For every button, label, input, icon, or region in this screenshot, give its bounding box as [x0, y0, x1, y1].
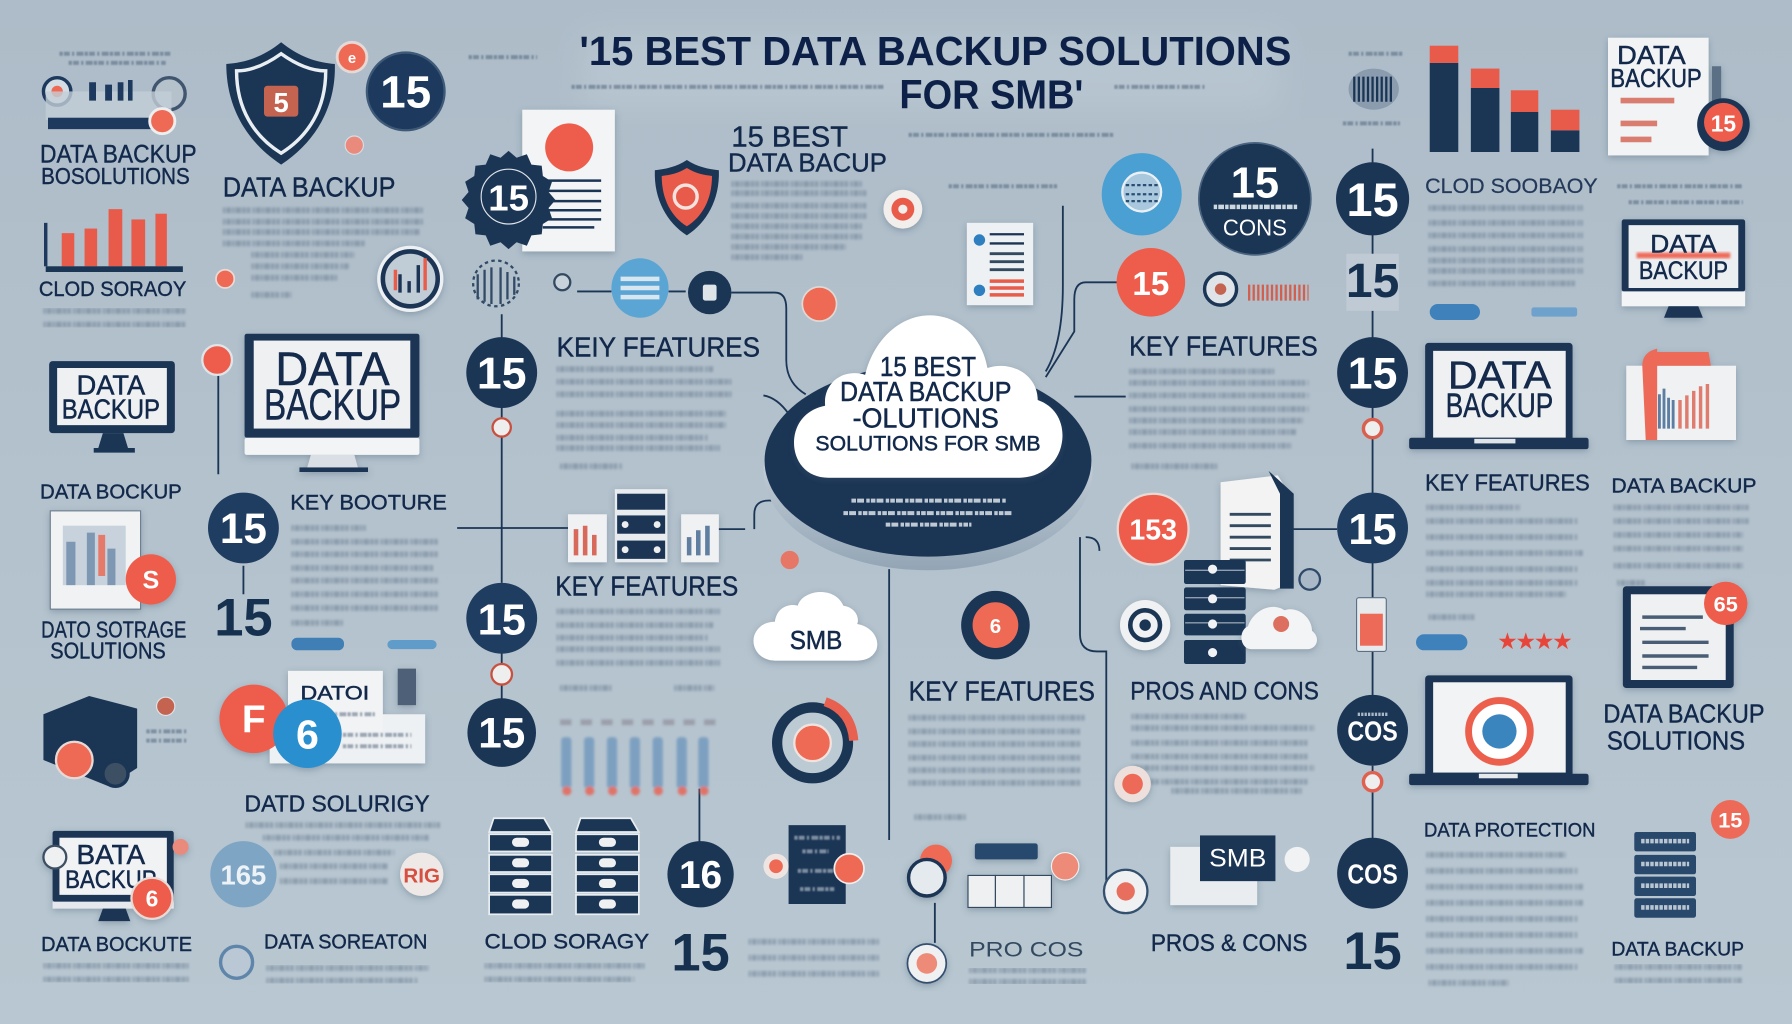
badge: red 15: 15: [1132, 266, 1169, 303]
icon: blue globe circle: [1102, 153, 1182, 235]
heading: 15 best data backup: 15 BEST: [731, 121, 848, 153]
panel: tablet document: 65: [1714, 591, 1738, 616]
panel: small cards and cluster: [909, 843, 1079, 907]
heading: key features: KEY FEATURES: [1129, 330, 1318, 361]
badge: cos: COS: [1347, 716, 1398, 747]
icon: small ring: [221, 946, 253, 978]
panel: server list: [1634, 832, 1696, 918]
badge: red 15: [1117, 248, 1185, 317]
red label: [1642, 782, 1703, 791]
title: '15 BEST DATA BACKUP SOLUTIONS: [579, 28, 1291, 74]
badge: 15: [466, 337, 537, 408]
heading: data backup: DATA BACKUP: [1611, 475, 1757, 498]
badge: 16: [667, 841, 734, 907]
icon: red badge 15: [1711, 800, 1750, 839]
panel: report document: S: [142, 567, 159, 595]
text block: [246, 825, 440, 881]
heading: key features: KEY FEATURES: [555, 570, 738, 601]
text block: [1131, 717, 1314, 791]
rating stars: ★★★★: [1497, 628, 1573, 654]
panel: document with F and 6 badges: 6: [296, 712, 319, 758]
icon: ring chart: [377, 246, 443, 312]
text block: [1611, 764, 1691, 767]
icon: small red mark: [345, 136, 363, 154]
heading: data storage solutions: SOLUTIONS: [50, 637, 166, 663]
badge: 15 cons: [1199, 143, 1311, 255]
panel: central cloud: -OLUTIONS: [853, 402, 999, 433]
chart: stacked bars: [1430, 46, 1579, 152]
heading: pro cons: PRO COS: [969, 937, 1083, 962]
number 15: 15: [1346, 255, 1399, 308]
badge: red ring: [400, 853, 443, 896]
heading: 15 best data backup: DATA BACUP: [728, 147, 887, 177]
panel: document with red badge: 15: [1711, 110, 1736, 136]
badge: 165: 165: [221, 860, 266, 891]
heading: data backup solutions: [40, 140, 197, 189]
badge: 15: [467, 698, 536, 767]
panel: small document: [967, 223, 1033, 305]
panel: laptop with ring: [1409, 675, 1589, 785]
heading: cloud storage: CLOD SOOBAOY: [1425, 173, 1598, 198]
badge: 16: 16: [679, 854, 722, 897]
number 15: 15: [671, 923, 730, 982]
text block: [1426, 855, 1583, 983]
heading: data protection: DATA PROTECTION: [1424, 820, 1595, 842]
bar chart: red bars: [46, 209, 183, 272]
icon: striped globe: [1343, 54, 1403, 123]
panel: folder chart: [1626, 349, 1736, 440]
panel: large monitor: BACKUP: [264, 381, 401, 429]
badge: 15: 15: [220, 505, 267, 552]
heading: data backup solutions: DATA BACKUP: [1603, 698, 1765, 728]
icon: red ring badge: [961, 591, 1030, 659]
icon: red badge: e: [348, 51, 356, 67]
panel: navy card with badges: [763, 825, 864, 904]
badge: 15: 15: [477, 350, 527, 399]
panel: small monitor: BACKUP: [62, 393, 160, 424]
panel: central cloud: [763, 315, 1093, 570]
panel: tablet document: [1623, 582, 1747, 688]
panel: document with red badge: DATA: [1617, 40, 1686, 70]
icon: target circle: [883, 190, 922, 229]
text block: [909, 718, 1086, 817]
text block: [1617, 186, 1743, 202]
badge: 15: [1337, 493, 1408, 563]
heading: key features: KEIY FEATURES: [557, 332, 760, 363]
heading: key feature: KEY BOOTURE: [290, 490, 447, 515]
heading: 15 best data backup: [728, 121, 887, 177]
node marker: [1363, 773, 1382, 791]
text block: [557, 369, 731, 466]
panel: laptop data backup: DATA: [1448, 355, 1551, 398]
badge: 15: [466, 583, 537, 654]
badge: 15 cons: CONS: [1223, 214, 1287, 240]
heading: pros and cons: PROS AND CONS: [1130, 677, 1319, 705]
panel: report document: [50, 511, 176, 609]
heading: cloud storage: CLOD SORAGY: [485, 929, 649, 954]
badge: cos: [1337, 838, 1408, 909]
text block: [1426, 507, 1583, 617]
panel: document and servers: 153: [1129, 514, 1177, 546]
panel: small monitor right: [1622, 219, 1745, 318]
badge: 15: 15: [1348, 350, 1397, 399]
text block: [1429, 208, 1583, 283]
icon: small red mark: [781, 551, 799, 569]
panel: small monitor: DATA: [77, 369, 146, 400]
panel: SMB cloud: SMB: [790, 625, 842, 655]
icon: small shield: [1299, 569, 1320, 590]
text block: [43, 966, 189, 979]
panel: top-left icons: [43, 54, 185, 134]
text block: [291, 528, 440, 623]
heading: pros and cons: PROS & CONS: [1151, 930, 1307, 957]
heading: data backup: DATA BACKUP: [223, 172, 395, 203]
panel: small monitor bata backup: 6: [146, 885, 158, 911]
badge: 15: 15: [478, 709, 525, 756]
panel: document with F and 6 badges: [219, 669, 425, 768]
heading: key features: KEY FEATURES: [909, 676, 1095, 707]
number 15: 15: [214, 588, 273, 647]
text block: [223, 210, 423, 295]
badge: 15: 15: [1348, 506, 1397, 554]
panel: document with red badge: [1608, 38, 1750, 155]
panel: small monitor bata backup: BATA: [77, 839, 146, 870]
badge: 15: 15: [478, 596, 526, 644]
icon: red pin: [202, 345, 232, 375]
panel: laptop data backup: BACKUP: [1446, 387, 1553, 425]
text block: [1129, 371, 1309, 466]
badge: 15: [1336, 162, 1409, 235]
small pills: [1430, 304, 1577, 320]
text block: [266, 968, 429, 981]
panel: SMB card: [1104, 835, 1310, 913]
heading: data backup solutions: SOLUTIONS: [1607, 726, 1745, 756]
heading: data backup solutions: DATA BACKUP: [40, 140, 197, 168]
panel: small monitor: [49, 361, 175, 453]
panel: large monitor: DATA: [275, 343, 390, 395]
icon: red shield: [655, 160, 719, 235]
panel: document with F and 6 badges: DATOI: [301, 682, 369, 704]
text block: [969, 970, 1086, 982]
badge: 15: 15: [380, 66, 431, 117]
heading: data storage: DATA SOREATON: [264, 931, 427, 954]
heading: key features: KEY FEATURES: [1425, 469, 1590, 495]
panel: large monitor: [245, 334, 419, 472]
panel: small monitor bata backup: [43, 831, 189, 921]
node marker: [1363, 419, 1382, 438]
heading: data backup: DATA BOCKUTE: [41, 933, 192, 956]
badge: 15: [1337, 337, 1408, 408]
pills: [291, 638, 437, 650]
chart: blue columns: [560, 722, 720, 795]
badge: cos: COS: [1347, 858, 1398, 889]
icon: striped globe: [473, 261, 519, 306]
icon: truck box: [43, 696, 189, 786]
panel: SMB card: SMB: [1209, 844, 1266, 872]
connector lines: [218, 149, 1373, 943]
icon: red pin: [802, 287, 837, 321]
icon: blue database circle: [611, 258, 669, 318]
panel: document with red badge: BACKUP: [1610, 63, 1702, 93]
panel: small monitor right: BACKUP: [1639, 257, 1728, 285]
icon: gauge: [777, 702, 854, 778]
text block: [1614, 507, 1749, 583]
text block: [1615, 967, 1743, 981]
heading: data backup solutions: BOSOLUTIONS: [41, 163, 190, 189]
badge: red ring: RIG: [403, 864, 440, 887]
heading: data storage solutions: [41, 617, 186, 663]
icon: navy lock circle: [688, 271, 731, 314]
text block: [485, 966, 646, 979]
icon: red ring badge: 6: [990, 615, 1001, 638]
icon: big shield: [226, 42, 335, 165]
icon: ring node: [554, 274, 570, 290]
node marker: [493, 418, 511, 437]
title: [579, 28, 1291, 118]
text block: [1157, 962, 1309, 967]
badge: cos: [1337, 695, 1408, 766]
panel: seal and document: 15: [488, 177, 529, 218]
strips of small text: [469, 57, 1206, 186]
text block: [43, 311, 185, 325]
badge: 15: [208, 493, 279, 563]
rating stars: [1416, 628, 1573, 654]
panel: small monitor right: DATA: [1650, 231, 1717, 259]
panel: small monitor bata backup: BACKUP: [65, 866, 157, 894]
heading: data storage solutions: DATO SOTRAGE: [41, 617, 186, 643]
panel: drawers: [489, 818, 639, 914]
badge: 165: [210, 841, 277, 907]
panel: document and servers: [1118, 471, 1317, 664]
icon: big shield: 5: [274, 87, 289, 118]
panel: central cloud: 15 BEST: [880, 351, 976, 382]
heading: data solutions: DATD SOLURIGY: [245, 790, 430, 816]
panel: document with F and 6 badges: F: [242, 699, 266, 742]
panel: seal and document: [462, 110, 615, 251]
node marker: [491, 664, 512, 685]
text block: [749, 942, 880, 974]
panel: central cloud: SOLUTIONS FOR SMB: [815, 430, 1041, 455]
title: FOR SMB': [899, 72, 1083, 118]
panel: SMB cloud: [753, 592, 877, 661]
badge: 15: [367, 53, 445, 130]
heading: cloud storage: CLOD SORAOY: [39, 276, 186, 301]
number 15: 15: [1343, 922, 1402, 981]
cloud shape: [794, 315, 1062, 478]
heading: data backup solutions: [1603, 698, 1765, 756]
panel: central cloud: DATA BACKUP: [840, 376, 1011, 407]
icon: red ring: [1114, 766, 1151, 802]
text block: [557, 611, 720, 688]
icon: ring: [907, 944, 946, 983]
icon: ring and barcode: [1205, 273, 1309, 305]
panel: chart cards and server: [568, 489, 719, 562]
icon: red badge 15: 15: [1718, 807, 1742, 832]
icon: small red badge: [216, 270, 234, 288]
heading: data bockup: DATA BOCKUP: [40, 480, 182, 503]
icon: phone: [1357, 598, 1386, 651]
text block: [731, 184, 866, 257]
badge: 15 cons: 15: [1231, 160, 1279, 208]
badge: 15: 15: [1347, 174, 1399, 226]
heading: data backup: DATA BACKUP: [1611, 938, 1744, 960]
panel: laptop data backup: [1409, 343, 1589, 449]
icon: red badge: [337, 42, 367, 72]
